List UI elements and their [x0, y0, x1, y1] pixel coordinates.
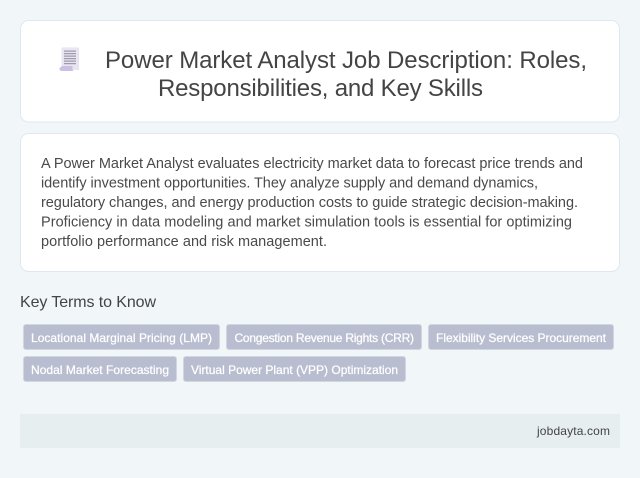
heading: title: Responsibilities, and Key Skills [158, 75, 483, 102]
tag: nodal: Nodal Market Forecasting [31, 363, 169, 377]
tag: flexibility [428, 324, 614, 350]
icon: document scroll [60, 48, 79, 71]
panel: summary card [20, 134, 620, 272]
panel: title card [20, 20, 620, 122]
tag: LMP: Locational Marginal Pricing (LMP) [31, 331, 212, 345]
tags: key terms [24, 324, 614, 382]
text block: summary: identify investment opportunities. They analyze supply and demand dynamics, [41, 176, 538, 192]
heading: key terms: Key Terms to Know [20, 294, 156, 311]
text block: summary: regulatory changes, and energy production costs to guide strategic decision-making. [41, 195, 578, 211]
tag: VPP: Virtual Power Plant (VPP) Optimization [191, 363, 398, 377]
tag: flexibility: Flexibility Services Procurement [436, 331, 607, 345]
text block: summary [41, 156, 583, 250]
tag: CRR [226, 324, 422, 350]
tag: VPP [184, 356, 406, 382]
heading: title [105, 47, 587, 102]
tag: nodal [24, 356, 176, 382]
text block: summary: portfolio performance and risk management. [41, 234, 327, 250]
footer [20, 414, 620, 448]
text block: summary: Proficiency in data modeling and market simulation tools is essential for optimizing [41, 214, 572, 230]
tag: LMP [24, 324, 220, 350]
heading: title: Power Market Analyst Job Description: Roles, [105, 47, 587, 74]
tag: CRR: Congestion Revenue Rights (CRR) [234, 331, 414, 345]
footer: jobdayta.com [536, 424, 610, 438]
text block: summary: A Power Market Analyst evaluates electricity market data to forecast price trends and [41, 156, 583, 172]
